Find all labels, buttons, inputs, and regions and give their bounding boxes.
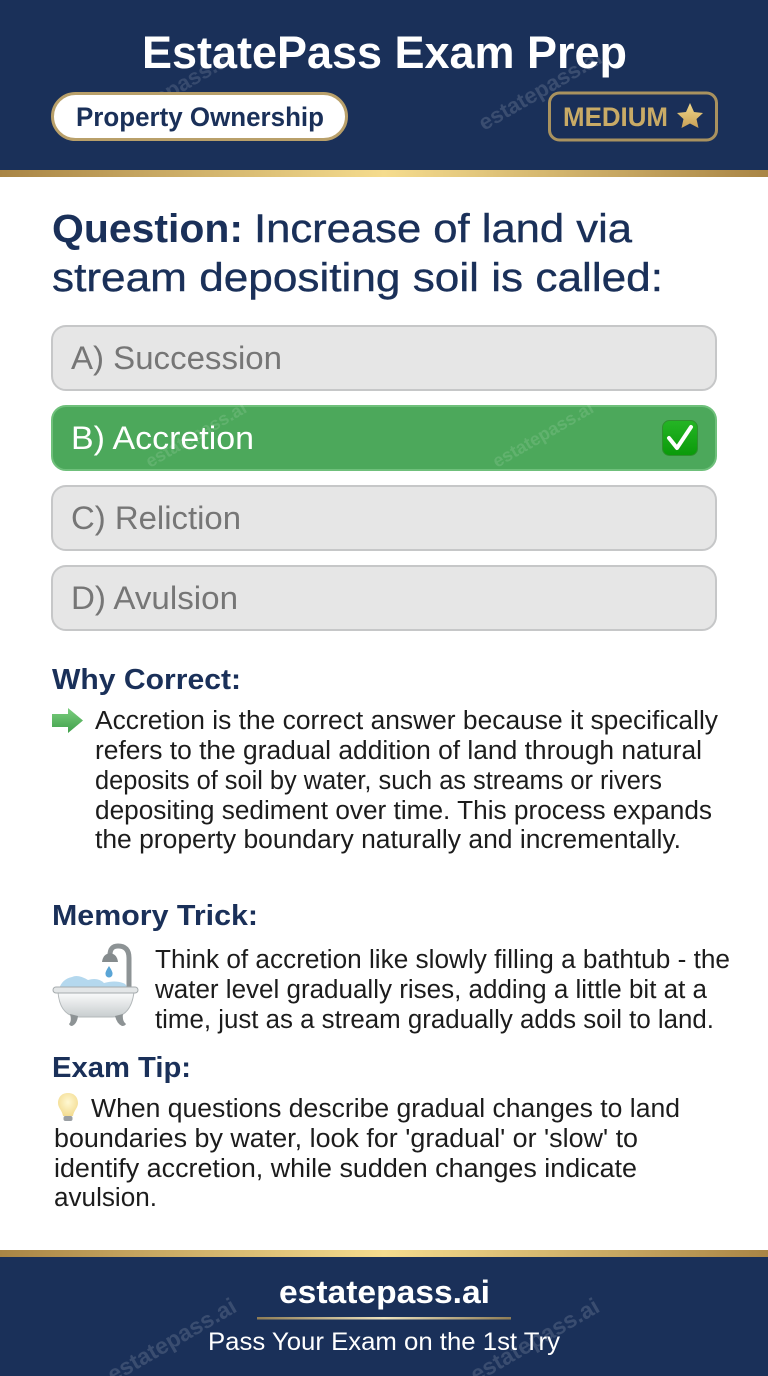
title: EstatePass Exam Prep — [142, 27, 627, 78]
option B correct: B) Accretion — [71, 420, 254, 456]
exam tip text: boundaries by water, look for 'gradual' or 'slow' to — [54, 1125, 638, 1153]
option D — [52, 566, 716, 630]
header band — [0, 0, 768, 170]
why correct text: the property boundary naturally and incrementally. — [95, 826, 681, 854]
question heading — [52, 207, 663, 300]
icon: light bulb — [58, 1093, 78, 1121]
question heading: Question: — [52, 207, 243, 251]
exam tip text: identify accretion, while sudden changes indicate — [54, 1155, 637, 1183]
category pill — [52, 94, 346, 140]
question heading: stream depositing soil is called: — [52, 256, 663, 300]
footer site name: estatepass.ai — [279, 1274, 490, 1310]
difficulty badge: MEDIUM — [563, 102, 668, 132]
exam tip text: When questions describe gradual changes to land — [91, 1095, 680, 1123]
option B correct: estatepass.ai — [142, 398, 250, 471]
icon: star — [677, 103, 703, 128]
option A — [52, 326, 716, 390]
header band: estatepass.ai — [474, 45, 606, 135]
why correct text — [95, 707, 718, 854]
memory trick heading: Memory Trick: — [52, 900, 258, 932]
option B correct — [52, 398, 716, 471]
footer band — [0, 1257, 768, 1376]
why correct text: deposits of soil by water, such as streams or rivers — [95, 767, 662, 795]
option A: A) Succession — [71, 340, 282, 376]
option C — [52, 486, 716, 550]
memory trick text: time, just as a stream gradually adds soil to land. — [155, 1006, 714, 1034]
difficulty badge — [550, 93, 716, 140]
memory trick text — [154, 946, 730, 1034]
option D: D) Avulsion — [71, 580, 238, 616]
footer tagline: Pass Your Exam on the 1st Try — [208, 1328, 561, 1356]
icon: bathtub — [53, 946, 138, 1026]
question heading: Increase of land via — [254, 207, 633, 251]
exam tip text: avulsion. — [54, 1184, 157, 1212]
category pill: Property Ownership — [76, 102, 324, 132]
icon: check mark — [662, 420, 698, 456]
why correct text: Accretion is the correct answer because it specifically — [95, 707, 718, 735]
icon: green arrow — [52, 708, 83, 733]
why correct text: refers to the gradual addition of land through natural — [95, 737, 702, 765]
memory trick text: Think of accretion like slowly filling a bathtub - the — [155, 946, 730, 974]
gold divider bottom — [0, 1250, 768, 1257]
why correct text: depositing sediment over time. This process expands — [95, 797, 712, 825]
header band: estatepass.ai — [105, 45, 237, 135]
gold divider top — [0, 170, 768, 177]
exam tip heading: Exam Tip: — [52, 1052, 191, 1084]
option B correct: estatepass.ai — [489, 398, 597, 471]
memory trick text: water level gradually rises, adding a little bit at a — [154, 976, 708, 1004]
exam tip text — [54, 1095, 680, 1212]
why correct heading: Why Correct: — [52, 664, 241, 696]
option C: C) Reliction — [71, 500, 241, 536]
